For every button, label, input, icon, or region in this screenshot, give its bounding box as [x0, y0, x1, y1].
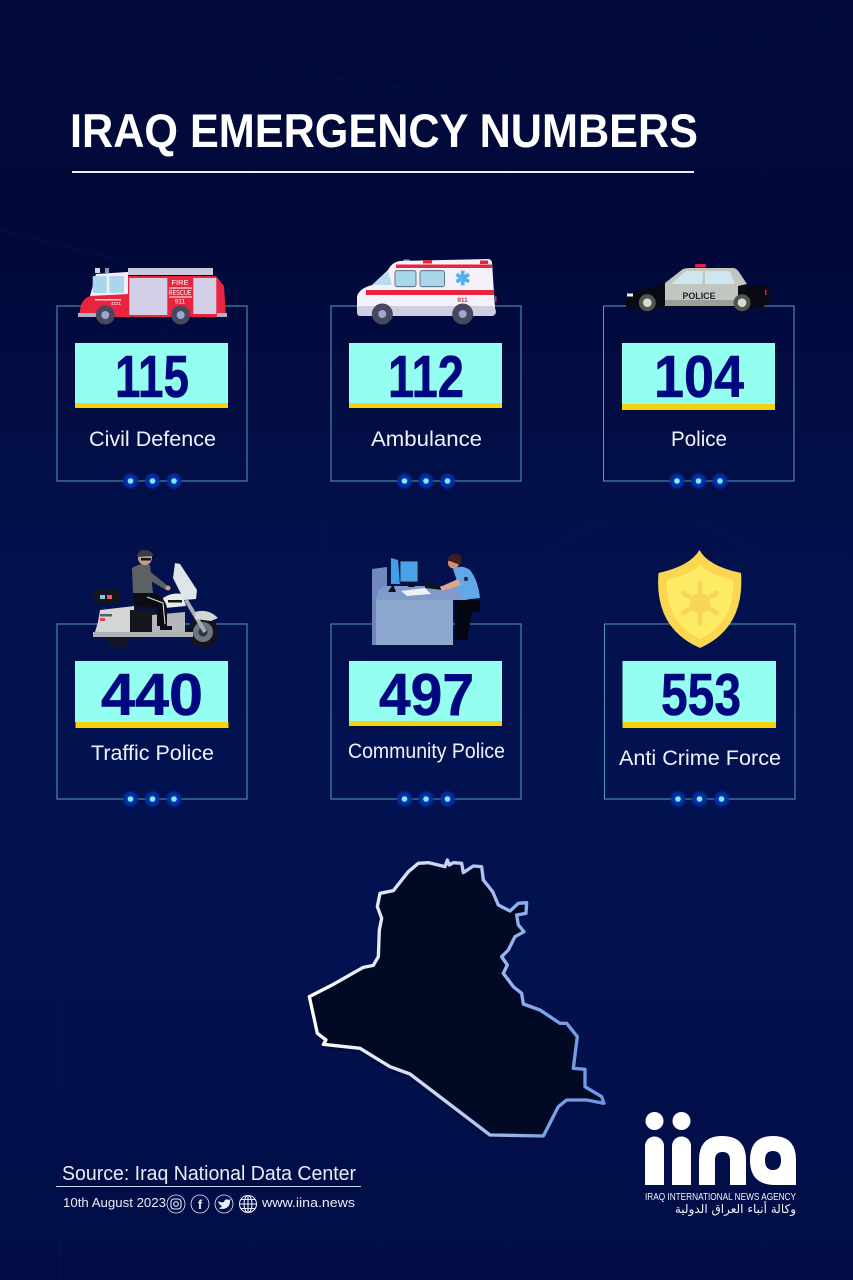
website: www.iina.news: [261, 1195, 356, 1210]
icon: fire truck: 911: [175, 298, 186, 306]
panel: Civil Defence: [57, 268, 247, 490]
panel: Traffic Police: [57, 550, 247, 808]
logo: iina: [645, 1112, 796, 1217]
number: 115: 115: [115, 344, 189, 410]
icon: ambulance: ✱: [455, 269, 471, 290]
panel: Community Police: [331, 554, 521, 808]
panel: Anti Crime Force: [604, 550, 795, 808]
icon: fire truck: [78, 268, 227, 324]
icon: globe: [240, 1196, 256, 1212]
logo text: English: IRAQ INTERNATIONAL NEWS AGENCY: [645, 1192, 796, 1203]
number: 497: 497: [379, 662, 474, 728]
status dots: [122, 472, 183, 490]
icon: police car: [626, 264, 771, 311]
icon: police car: POLICE: [682, 291, 716, 302]
label: Ambulance: Ambulance: [371, 428, 482, 451]
number: 440: 440: [101, 662, 203, 728]
label: Civil Defence: Civil Defence: [89, 428, 216, 451]
icon: ambulance: 911: [457, 297, 468, 304]
status dots: [122, 790, 183, 808]
date: 10th August 2023: [63, 1195, 166, 1210]
icon: dispatcher at desk: [372, 554, 480, 645]
label: Traffic Police: Traffic Police: [91, 742, 214, 765]
number: 112: 112: [388, 344, 464, 410]
icon: ambulance: +: [397, 288, 403, 299]
source text: Source: Iraq National Data Center: [62, 1163, 356, 1185]
label: Police: Police: [671, 428, 727, 451]
number: 553: 553: [661, 662, 741, 728]
status dots: [669, 790, 730, 808]
icon: fire truck: 4221: [111, 301, 122, 306]
icon: twitter: [215, 1195, 233, 1213]
logo text: Arabic: وكالة أنباء العراق الدولية: [675, 1201, 796, 1217]
status dots: [396, 472, 456, 490]
panel: Police: [604, 264, 794, 490]
status dots: [668, 472, 729, 490]
panel: Ambulance: [331, 259, 521, 490]
icon: police motorcycle: [93, 550, 218, 648]
number: 104: 104: [654, 344, 744, 410]
map of Iraq: [307, 860, 604, 1140]
icon: fire truck: RESCUE: [168, 290, 192, 297]
icon: gold shield: [658, 550, 741, 648]
title: IRAQ EMERGENCY NUMBERS: [70, 104, 698, 157]
icon: fire truck: FIRE: [171, 278, 189, 287]
icon: facebook: f: [198, 1197, 203, 1212]
icon: facebook: [191, 1195, 209, 1213]
icon: ambulance: [357, 259, 496, 324]
label: Community Police: Community Police: [348, 740, 505, 763]
label: Anti Crime Force: Anti Crime Force: [619, 747, 781, 770]
status dots: [396, 790, 456, 808]
icon: instagram: [167, 1195, 185, 1213]
